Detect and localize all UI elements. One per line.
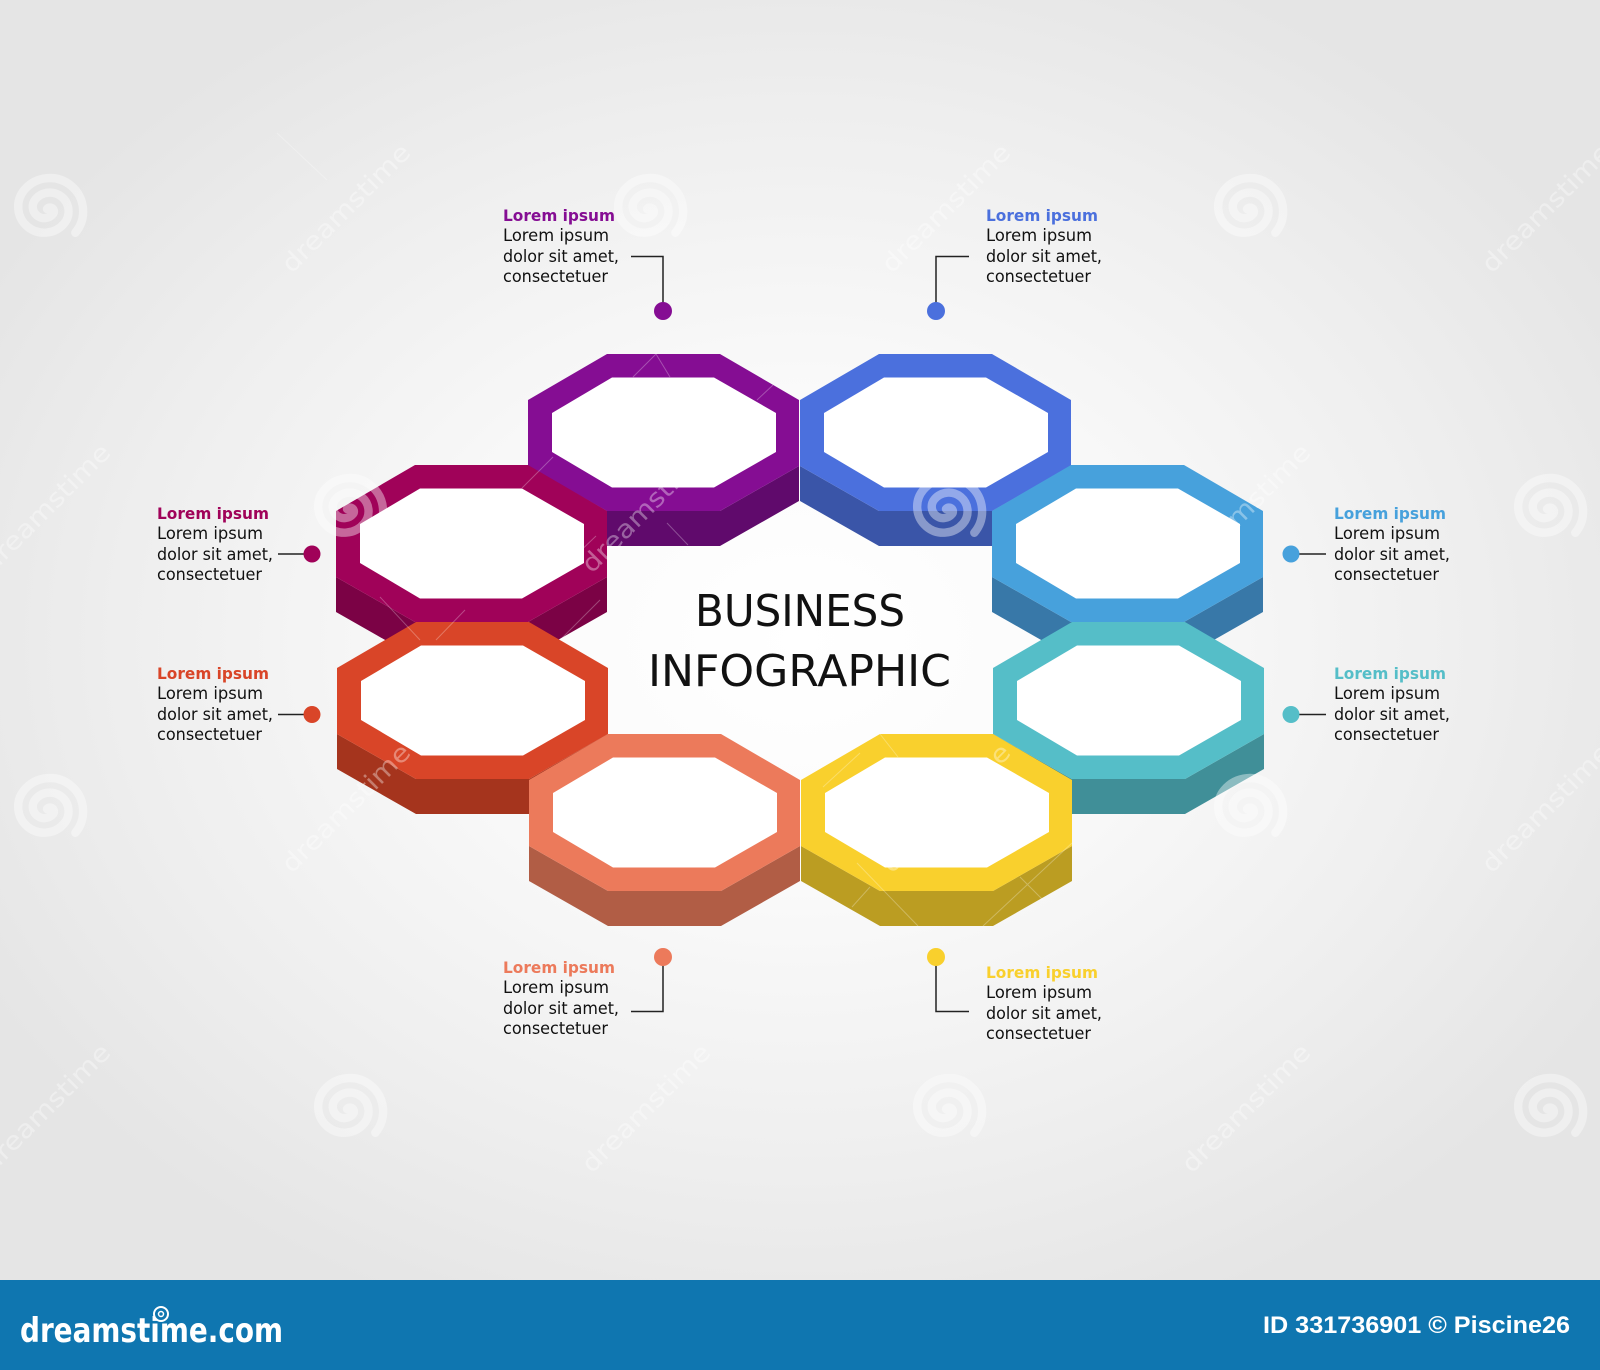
callout: red orange: Lorem ipsum: [157, 664, 269, 683]
callout: light blue: consectetuer: [1334, 564, 1439, 584]
callout: teal: consectetuer: [1334, 724, 1439, 744]
callout: magenta: consectetuer: [157, 564, 262, 584]
watermark text: dreamstime: [1476, 138, 1600, 278]
callout: purple: Lorem ipsum: [503, 225, 609, 245]
callout: yellow: consectetuer: [986, 1023, 1091, 1043]
callout: blue: Lorem ipsum: [986, 225, 1092, 245]
callout: teal: [1282, 664, 1450, 744]
watermark text: dreamstime: [576, 438, 716, 578]
callout: light blue: dolor sit amet,: [1334, 544, 1450, 564]
octagon 5: yellow: [801, 734, 1072, 926]
callout: teal: dolor sit amet,: [1334, 704, 1450, 724]
callout: blue: Lorem ipsum: [986, 206, 1098, 225]
callout: yellow: Lorem ipsum: [986, 963, 1098, 982]
callout: blue: consectetuer: [986, 266, 1091, 286]
callout: light blue: Lorem ipsum: [1334, 523, 1440, 543]
callout: salmon: [503, 948, 672, 1038]
watermark text: dreamstime: [876, 738, 1016, 878]
callout: salmon: Lorem ipsum: [503, 977, 609, 997]
callout: red orange: dolor sit amet,: [157, 704, 273, 724]
octagon 8: magenta: [336, 465, 607, 657]
callout: blue: [927, 206, 1102, 320]
title: INFOGRAPHIC: [648, 646, 951, 697]
title: [648, 586, 951, 697]
callout: magenta: Lorem ipsum: [157, 504, 269, 523]
callout: light blue: [1282, 504, 1450, 584]
watermark text: dreamstime: [576, 1038, 716, 1178]
watermark text: [0, 138, 1600, 1178]
watermark text: dreamstime: [876, 138, 1016, 278]
callout: magenta: Lorem ipsum: [157, 523, 263, 543]
callout: light blue: Lorem ipsum: [1334, 504, 1446, 523]
callout: magenta: dolor sit amet,: [157, 544, 273, 564]
callout: salmon: dolor sit amet,: [503, 998, 619, 1018]
octagon 2: blue: [800, 354, 1071, 546]
watermark text: dreamstime: [1176, 438, 1316, 578]
callout: purple: Lorem ipsum: [503, 206, 615, 225]
octagon 6: salmon: [529, 734, 800, 926]
octagon 1: purple: [528, 354, 799, 546]
callout: red orange: [157, 664, 320, 744]
watermark text: dreamstime: [1476, 738, 1600, 878]
callout: yellow: [927, 948, 1102, 1043]
octagon 4: teal: [993, 622, 1264, 814]
octagon 7: red orange: [337, 622, 608, 814]
callout: red orange: consectetuer: [157, 724, 262, 744]
callout: magenta: [157, 504, 320, 584]
callout: teal: Lorem ipsum: [1334, 683, 1440, 703]
callout: red orange: Lorem ipsum: [157, 683, 263, 703]
watermark text: dreamstime: [1176, 1038, 1316, 1178]
callout: yellow: dolor sit amet,: [986, 1003, 1102, 1023]
footer logo: dreamstime.com: [20, 1311, 283, 1351]
footer band: [0, 1280, 1600, 1370]
footer credit: ID 331736901 © Piscine26: [1263, 1312, 1570, 1339]
callout: purple: dolor sit amet,: [503, 246, 619, 266]
watermark text: dreamstime: [276, 738, 416, 878]
callout: salmon: Lorem ipsum: [503, 958, 615, 977]
callout: salmon: consectetuer: [503, 1018, 608, 1038]
watermark spirals: [8, 164, 1597, 1153]
watermark text: dreamstime: [276, 138, 416, 278]
octagon 3: light blue: [992, 465, 1263, 657]
callout: teal: Lorem ipsum: [1334, 664, 1446, 683]
callout: blue: dolor sit amet,: [986, 246, 1102, 266]
title: BUSINESS: [695, 586, 905, 637]
callout: purple: consectetuer: [503, 266, 608, 286]
callout: purple: [503, 206, 672, 320]
callout: yellow: Lorem ipsum: [986, 982, 1092, 1002]
